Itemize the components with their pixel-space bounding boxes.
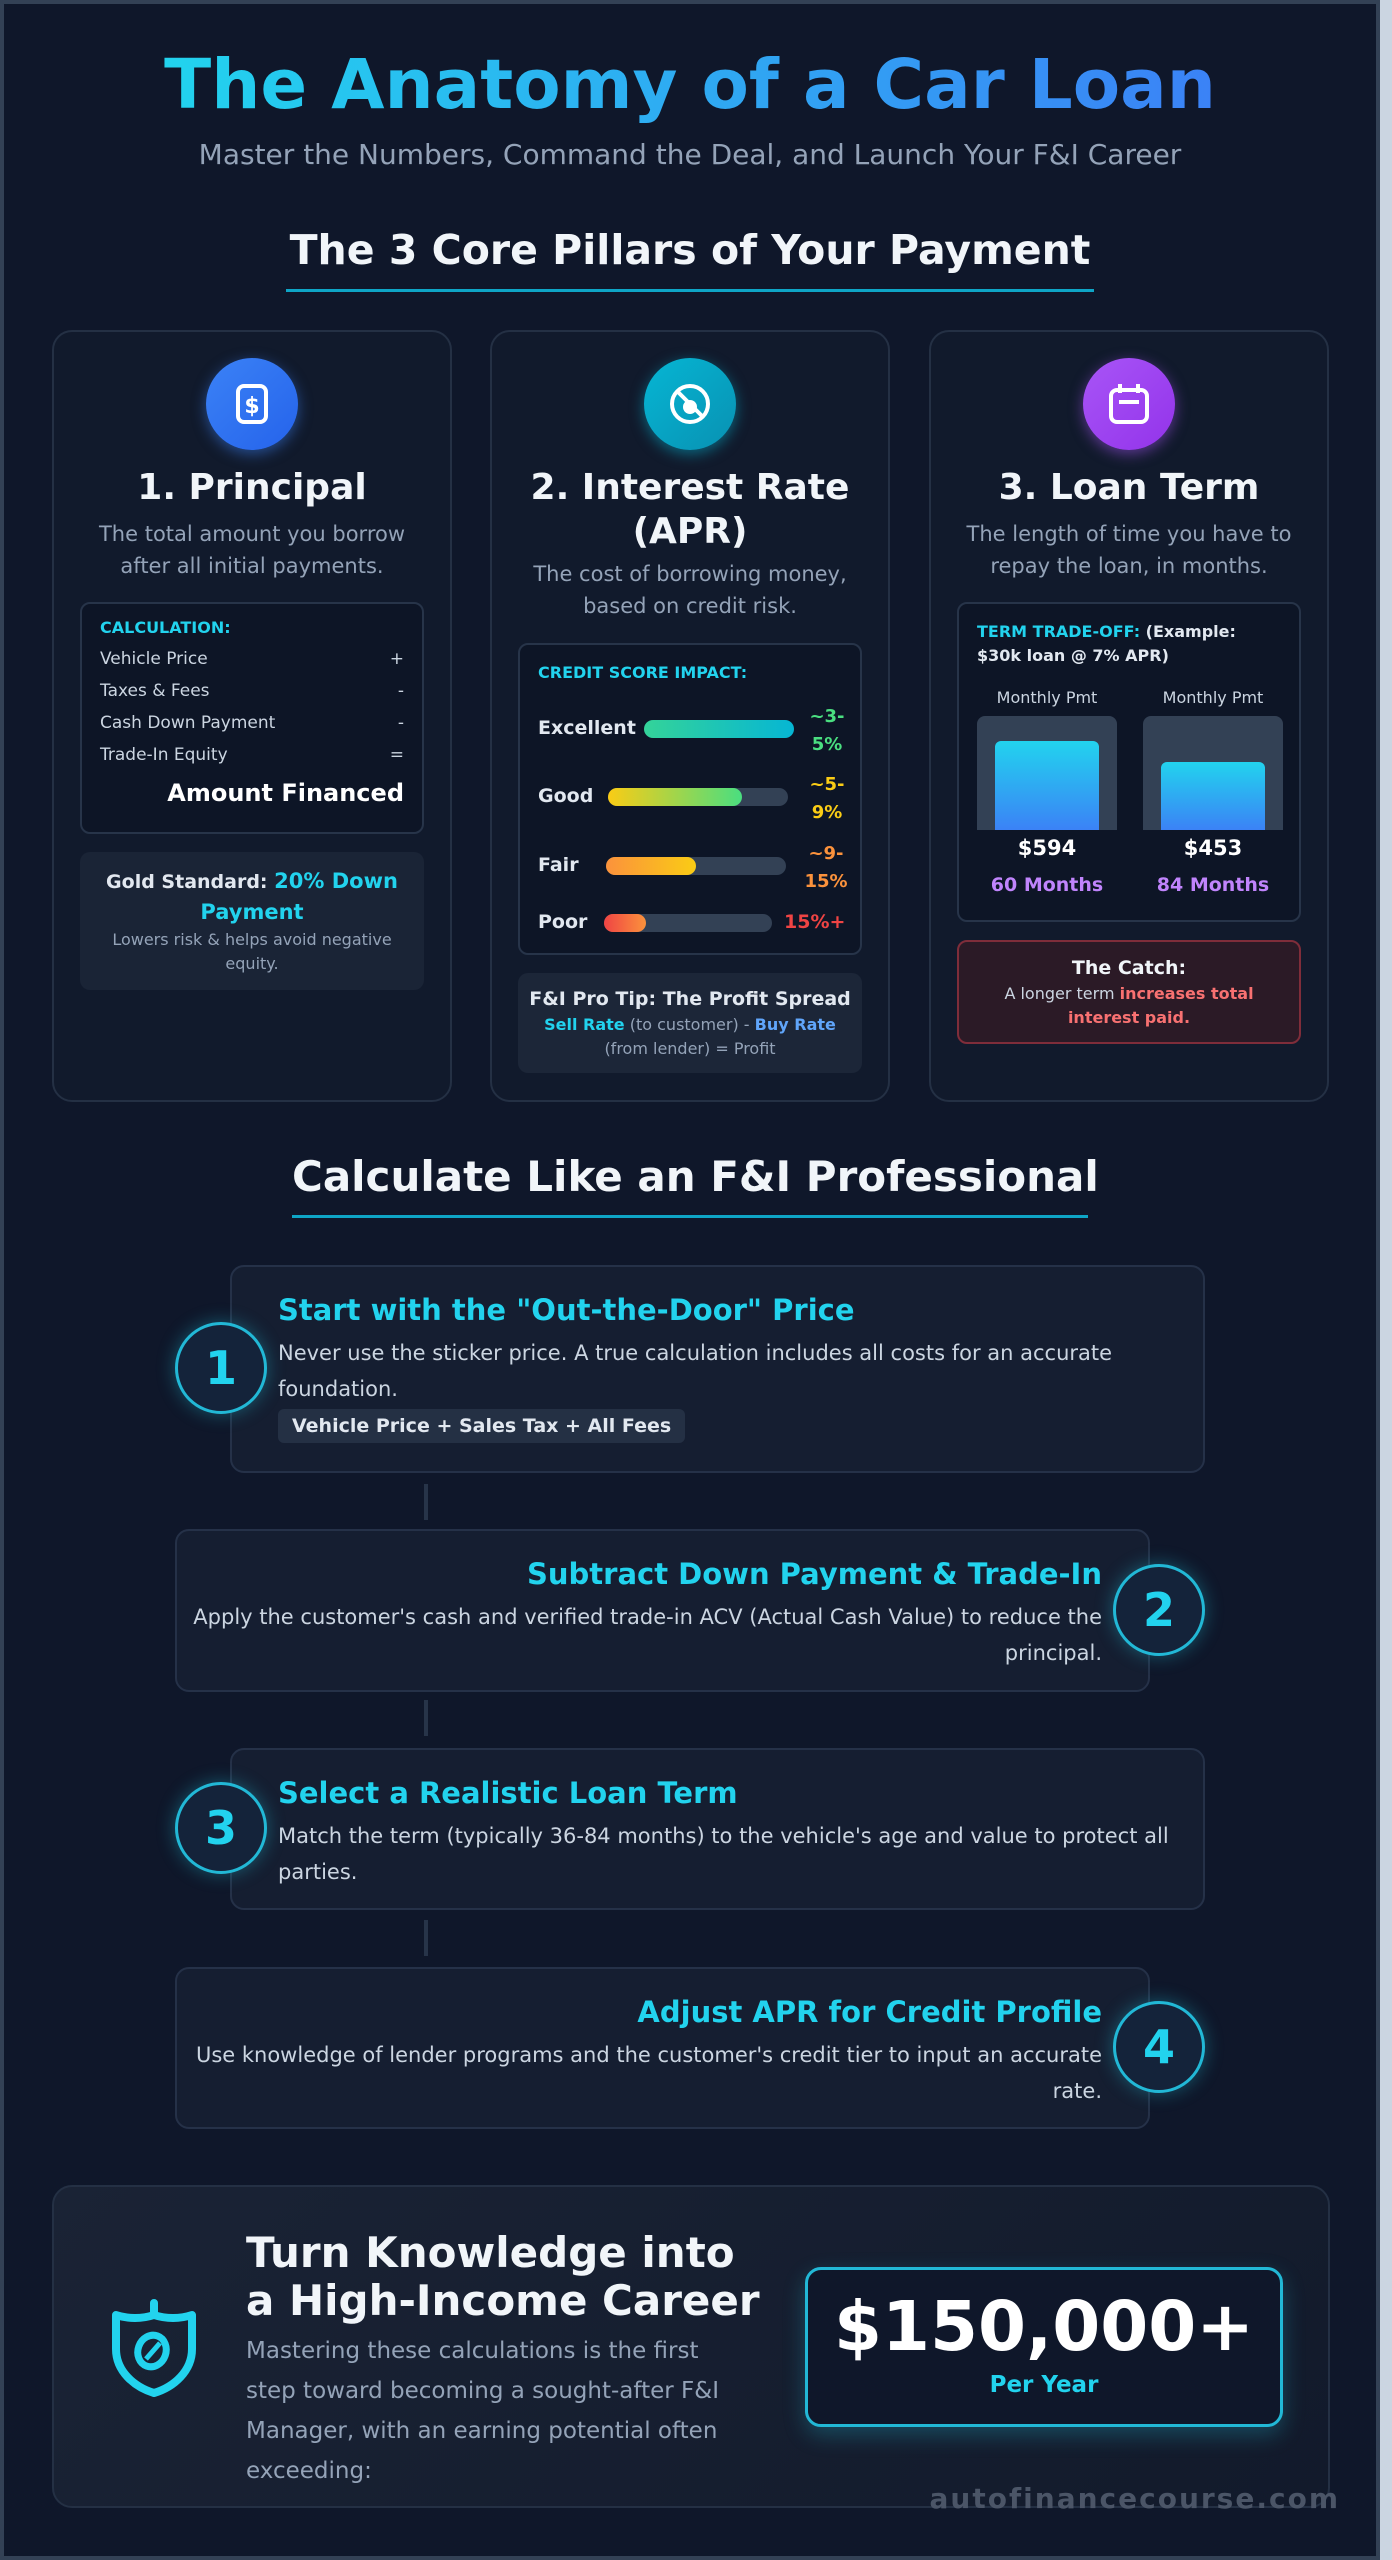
formula chip (278, 1409, 685, 1443)
panel: loan term (929, 330, 1329, 1102)
description: The total amount you borrow after all initial payments. (99, 522, 405, 578)
icon: calendar (1083, 358, 1175, 450)
bar: 84 months: 84 Months (1157, 874, 1269, 896)
step 2: Subtract Down Payment & Trade-In (527, 1557, 1102, 1591)
credit score chart: 9% (812, 802, 842, 823)
bar: 84 months: $453 (1184, 836, 1242, 860)
credit score chart: Poor (538, 911, 587, 933)
gold standard callout: Gold Standard: 20% Down Payment (106, 869, 398, 924)
credit score chart: Excellent (538, 717, 636, 739)
step 4: Adjust APR for Credit Profile (637, 1995, 1102, 2029)
number badge 3 (175, 1782, 267, 1874)
step 3: Select a Realistic Loan Term (278, 1776, 738, 1810)
description: The length of time you have to repay the loan, in months. (967, 522, 1291, 578)
calculation box: Cash Down Payment (100, 713, 275, 733)
credit score chart: CREDIT SCORE IMPACT: (538, 663, 747, 682)
step 3 (230, 1748, 1205, 1910)
calculation box: CALCULATION: (100, 618, 231, 637)
number badge 1 (175, 1322, 267, 1414)
step 2: Apply the customer's cash and verified trade-in ACV (Actual Cash Value) to reduce the principal. (193, 1605, 1102, 1665)
bar: 60 months: Monthly Pmt (997, 688, 1097, 707)
gold standard callout (80, 852, 424, 990)
bar: 60 months: $594 (1018, 836, 1076, 860)
credit score chart: 15%+ (784, 911, 845, 933)
step 4: Use knowledge of lender programs and the customer's credit tier to input an accurate rate. (196, 2043, 1102, 2103)
bar: 84 months (1143, 688, 1283, 896)
heading (246, 2228, 760, 2325)
calculation box: Trade-In Equity (100, 745, 228, 765)
number badge 3: 3 (205, 1801, 237, 1855)
pro tip callout: Sell Rate (to customer) - Buy Rate (from lender) = Profit (544, 1015, 836, 1058)
credit score chart: ~3- (809, 706, 845, 727)
text: Mastering these calculations is the first step toward becoming a sought-after F&I Manager, with an earning potential often exceeding: (246, 2338, 719, 2484)
bar: 60 months: 60 Months (991, 874, 1103, 896)
number badge 1: 1 (205, 1341, 237, 1395)
credit score chart: Good (538, 785, 593, 807)
credit score chart: ~5- (809, 774, 845, 795)
number badge 2: 2 (1143, 1583, 1175, 1637)
term trade-off chart: $30k loan @ 7% APR) (977, 646, 1169, 665)
heading: core pillars: The 3 Core Pillars of Your Payment (290, 226, 1090, 274)
step 1: Start with the "Out-the-Door" Price (278, 1293, 854, 1327)
step 1: Never use the sticker price. A true calculation includes all costs for an accurate foundation. (278, 1341, 1112, 1401)
income stat: Per Year (990, 2372, 1098, 2398)
heading: a High-Income Career (246, 2276, 760, 2325)
calculation box: Amount Financed (167, 779, 404, 807)
step 2 (175, 1529, 1150, 1692)
step 4 (175, 1967, 1150, 2129)
description: The cost of borrowing money, based on credit risk. (533, 562, 847, 618)
icon: percent coin (644, 358, 736, 450)
watermark: autofinancecourse.com (930, 2482, 1340, 2515)
income stat: $150,000+ (834, 2287, 1254, 2367)
heading: 1. Principal (137, 467, 367, 508)
calculation box: Vehicle Price (100, 649, 208, 669)
calculation box: = (390, 745, 404, 765)
credit score chart: ~9- (808, 843, 844, 864)
catch callout (957, 940, 1301, 1044)
credit score chart: Fair (538, 854, 579, 876)
calculation box: - (398, 681, 404, 701)
subtitle: Master the Numbers, Command the Deal, and Launch Your F&I Career (199, 138, 1181, 171)
pro tip callout (518, 973, 862, 1073)
income stat (805, 2267, 1283, 2427)
calculation box: - (398, 713, 404, 733)
title: The Anatomy of a Car Loan (164, 45, 1216, 125)
calculation box: Taxes & Fees (100, 681, 210, 701)
term trade-off chart: TERM TRADE-OFF: (Example: (977, 622, 1236, 641)
pro tip callout: F&I Pro Tip: The Profit Spread (529, 988, 851, 1010)
step 3: Match the term (typically 36-84 months) to the vehicle's age and value to protect all parties. (278, 1824, 1169, 1884)
catch callout: A longer term increases total interest paid. (1004, 984, 1254, 1027)
panel: principal (52, 330, 452, 1102)
panel: interest rate (490, 330, 890, 1102)
number badge 2 (1113, 1564, 1205, 1656)
formula chip: Vehicle Price + Sales Tax + All Fees (292, 1415, 671, 1437)
heading: 2. Interest Rate (APR) (531, 467, 849, 552)
step 1 (230, 1265, 1205, 1473)
number badge 4 (1113, 2001, 1205, 2093)
heading: Turn Knowledge into (246, 2228, 735, 2277)
icon: shield (112, 2299, 196, 2397)
gold standard callout: Lowers risk & helps avoid negative equity. (112, 930, 392, 973)
credit score chart (518, 643, 862, 955)
bar: 60 months (977, 688, 1117, 896)
credit score chart: 5% (812, 734, 842, 755)
bar: 84 months: Monthly Pmt (1163, 688, 1263, 707)
calculation box (80, 602, 424, 834)
term trade-off chart (957, 602, 1301, 922)
panel: career (52, 2185, 1330, 2508)
credit score chart: 15% (804, 871, 848, 892)
catch callout: The Catch: (1072, 957, 1186, 979)
number badge 4: 4 (1143, 2020, 1175, 2074)
heading: 3. Loan Term (999, 467, 1259, 508)
heading: calculate: Calculate Like an F&I Professional (292, 1152, 1099, 1201)
icon: calculator (206, 358, 298, 450)
icon: calculator: $ (244, 394, 260, 419)
calculation box: + (390, 649, 404, 669)
